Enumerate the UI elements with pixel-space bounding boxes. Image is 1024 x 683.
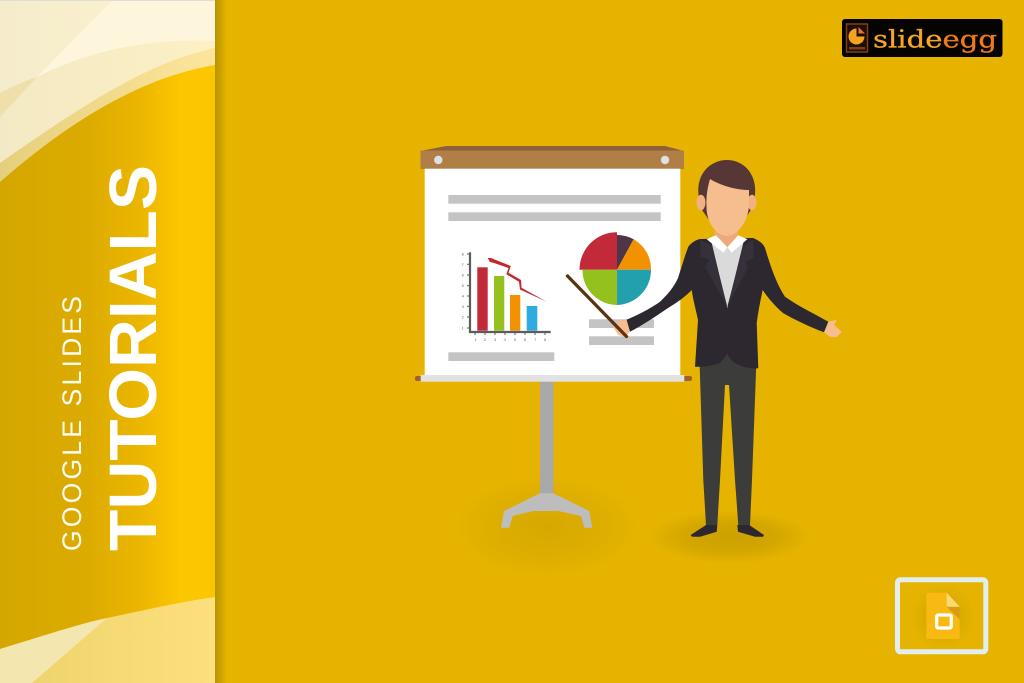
neck <box>715 224 738 248</box>
y axis labels: 2 <box>462 314 465 320</box>
presenter <box>568 160 842 537</box>
board rail <box>421 375 684 382</box>
shoe left <box>691 525 717 537</box>
y axis labels <box>462 252 465 330</box>
x axis labels: 1 <box>475 337 478 342</box>
stand base <box>501 493 592 528</box>
icon glow <box>910 583 976 651</box>
logo icon <box>846 24 868 52</box>
y axis labels: 5 <box>462 283 465 288</box>
bar green <box>494 276 504 331</box>
logo: slideegg <box>842 19 1002 57</box>
trend arrow <box>488 258 547 302</box>
chart axes <box>470 252 551 332</box>
x axis labels: 6 <box>524 337 527 342</box>
logo wordmark: slide egg <box>873 26 997 54</box>
jacket <box>626 238 828 368</box>
rail end right <box>682 376 692 381</box>
y axis labels: 7 <box>462 262 465 267</box>
trousers <box>699 345 757 525</box>
shadow: presenter <box>648 510 812 564</box>
y axis labels: 1 <box>462 326 465 330</box>
y axis labels: 8 <box>462 252 465 256</box>
board top cap <box>420 146 684 151</box>
shadow: stand <box>452 475 642 579</box>
left panel <box>0 0 227 683</box>
y axis labels: 4 <box>462 294 465 298</box>
stand pole <box>540 381 554 494</box>
x axis labels: 3 <box>494 337 497 342</box>
presentation board <box>415 146 692 382</box>
pointer <box>568 276 626 336</box>
x axis labels: 4 <box>504 337 507 342</box>
bar blue <box>527 306 537 331</box>
ear left <box>696 195 706 210</box>
board sheet <box>425 169 680 375</box>
ear right <box>748 195 756 210</box>
y axis labels: 6 <box>462 272 465 278</box>
text bar 2 <box>448 212 661 221</box>
board header <box>420 150 684 169</box>
header pin left <box>434 156 442 164</box>
text bar right 1 <box>589 319 654 328</box>
shirt <box>712 243 743 308</box>
badge frame <box>898 580 986 652</box>
collar left <box>707 235 727 253</box>
shoe right <box>737 525 764 537</box>
x axis labels: 8 <box>544 337 547 342</box>
lapel left <box>700 240 727 307</box>
hand right <box>824 320 842 337</box>
heading: tutorials: TUTORIALS <box>96 165 171 551</box>
bar chart <box>462 252 551 342</box>
rail end left <box>415 376 423 381</box>
text bar 1 <box>448 195 661 204</box>
bar orange <box>510 295 520 331</box>
x axis labels <box>475 337 547 342</box>
x axis labels: 5 <box>514 337 517 342</box>
header pin right <box>661 156 669 164</box>
slides icon <box>926 593 960 639</box>
face <box>706 179 749 236</box>
pie chart <box>580 232 651 305</box>
text bar bottom <box>448 352 554 361</box>
bar red <box>477 267 488 331</box>
axis ticks <box>467 254 545 335</box>
hair <box>698 160 755 230</box>
y axis labels: 3 <box>462 304 465 309</box>
google slides badge <box>898 580 986 652</box>
hand left <box>614 320 630 337</box>
heading: google slides: GOOGLE SLIDES <box>57 296 87 551</box>
lapel right <box>727 239 754 307</box>
collar right <box>727 235 747 253</box>
x axis labels: 2 <box>484 337 487 342</box>
text bar right 2 <box>589 336 654 345</box>
x axis labels: 7 <box>534 337 537 342</box>
